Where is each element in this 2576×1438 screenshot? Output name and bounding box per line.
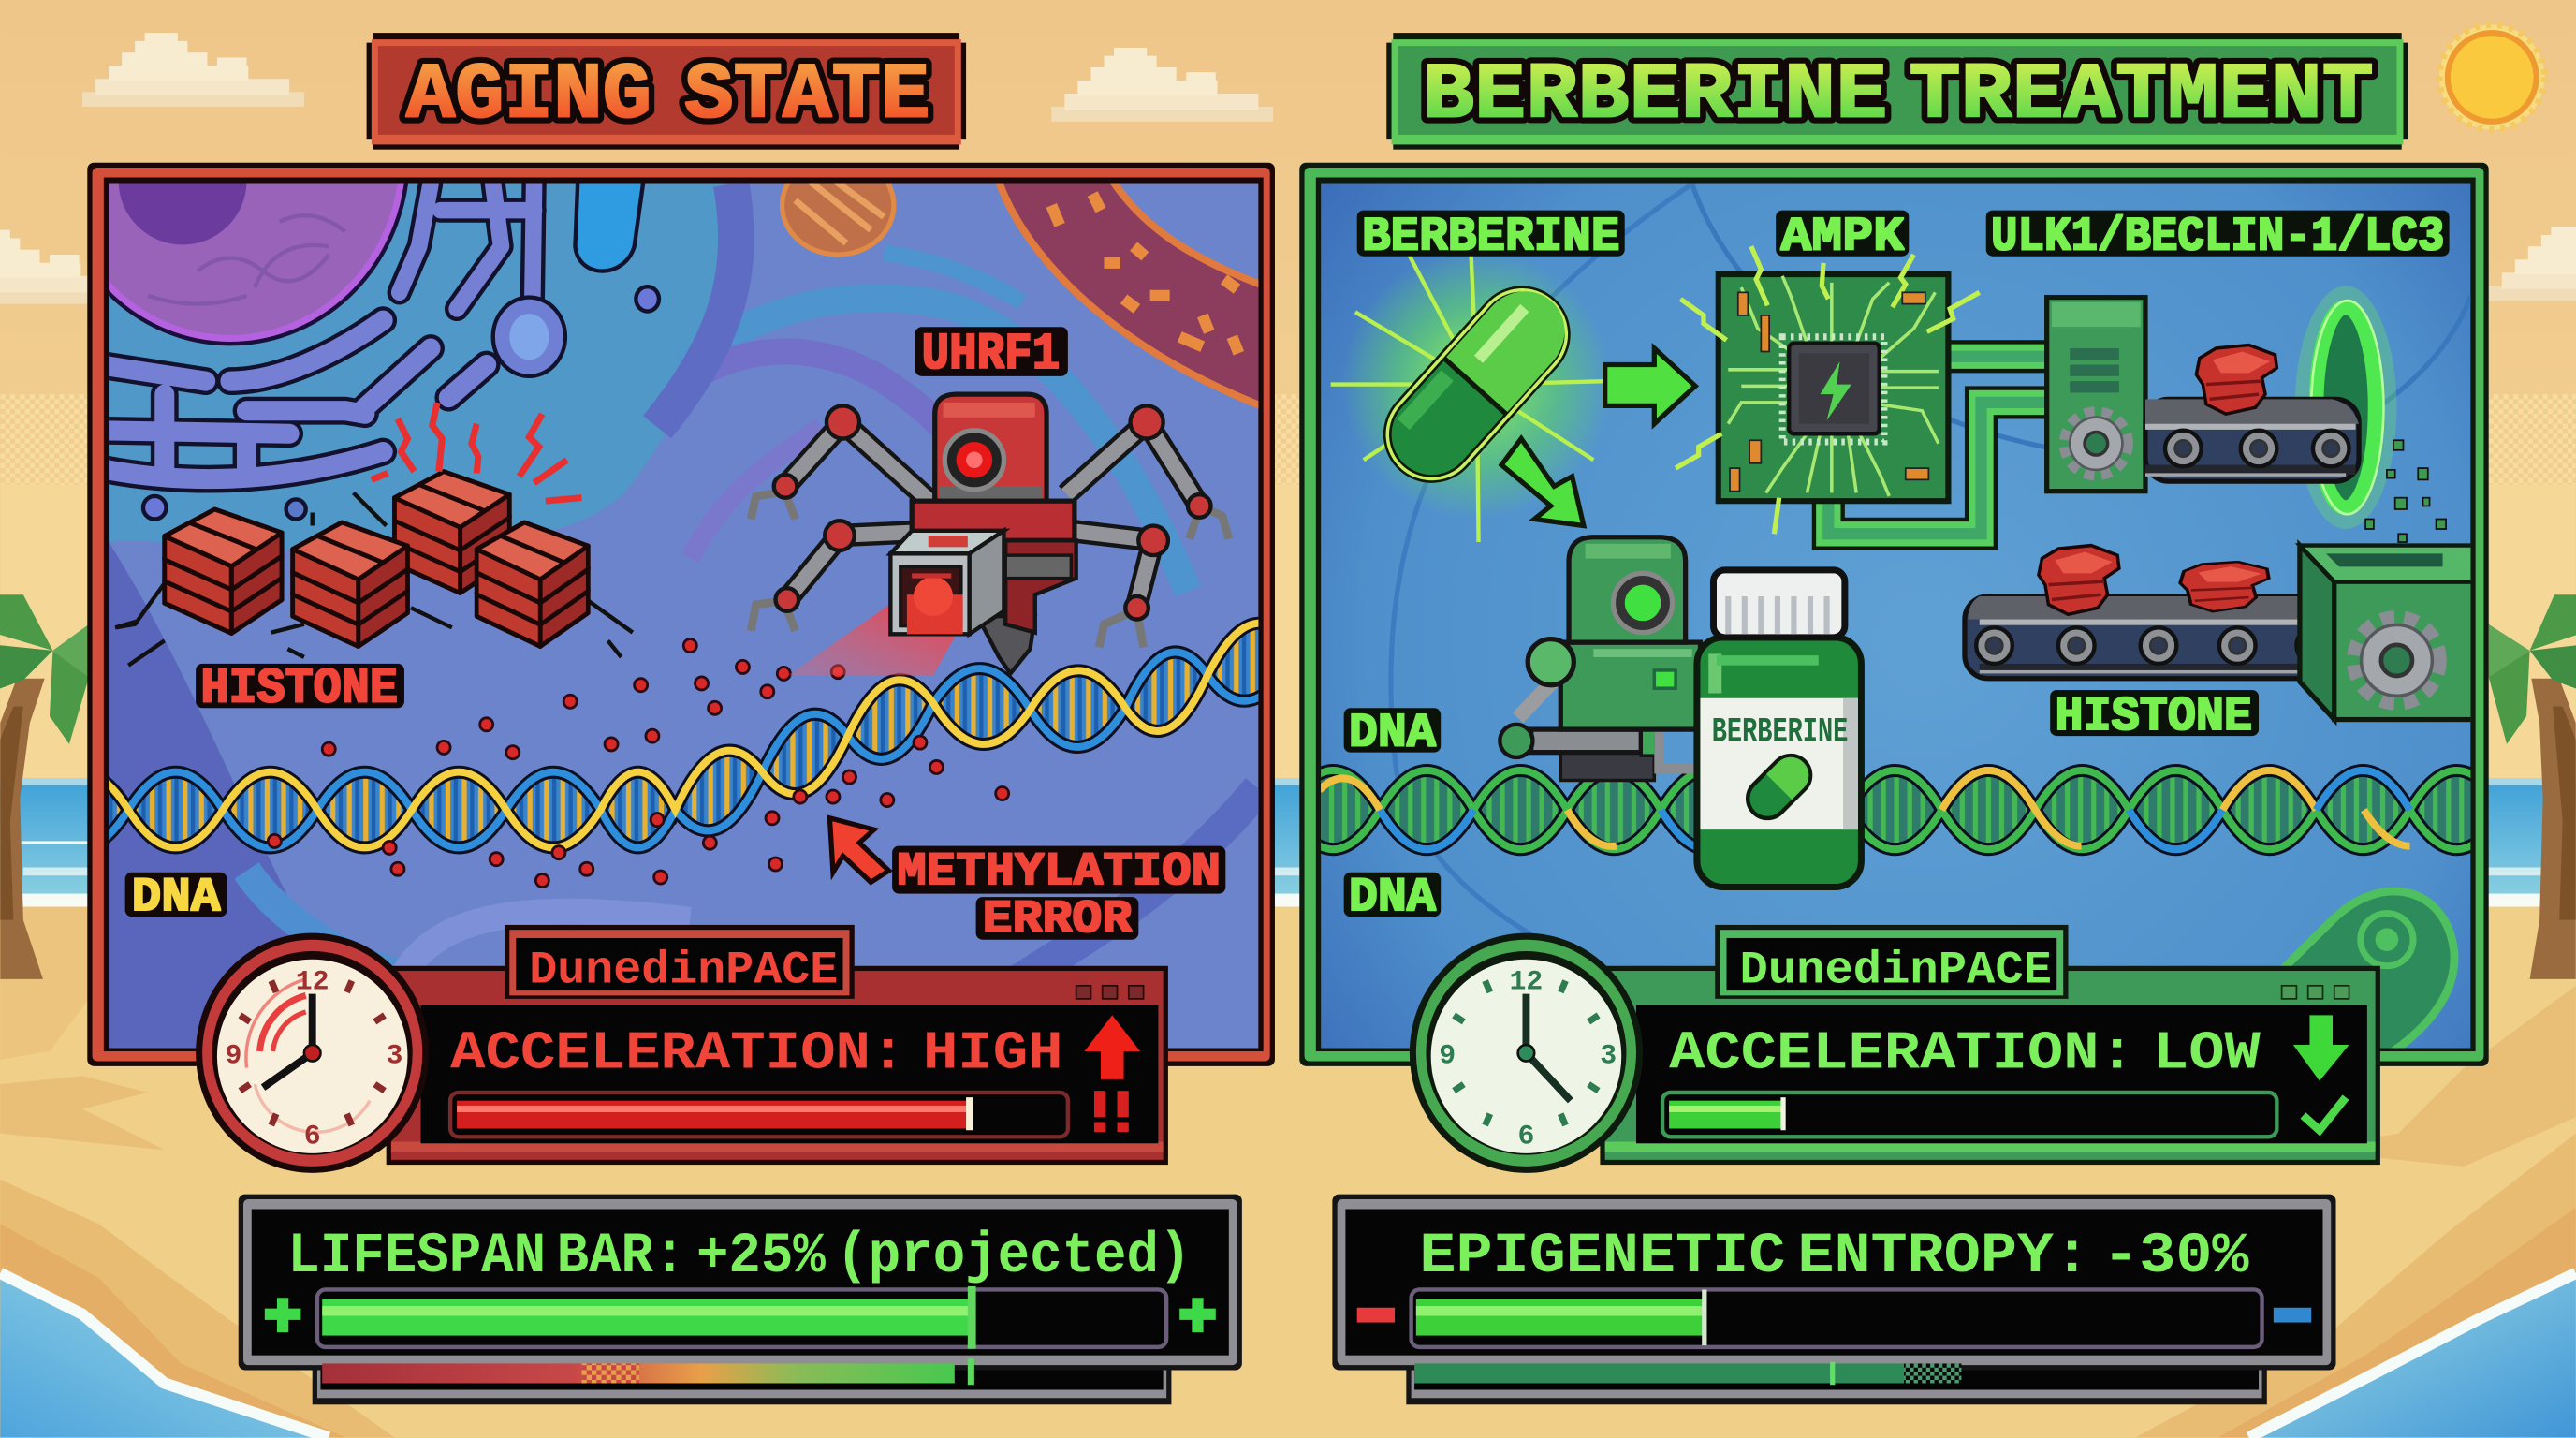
icon: minus marker (1357, 1308, 1395, 1323)
icon: cloud side left (0, 230, 137, 304)
recycling box with gear (2300, 546, 2476, 720)
sub bar: lifespan gradient (322, 1358, 974, 1385)
icon: sun (2439, 24, 2544, 130)
organelle: vesicles (143, 164, 659, 519)
label: methylation error: METHYLATION (897, 845, 1221, 898)
panel: lifespan bar (239, 1195, 1242, 1404)
clock numerals: 6 (1517, 1120, 1534, 1152)
icon: up arrow (1084, 1015, 1140, 1079)
tab: DunedinPACE: DunedinPACE (1740, 944, 2052, 996)
icon: check mark (2303, 1097, 2346, 1130)
panel: DunedinPACE low acceleration (1600, 925, 2380, 1165)
icon: cloud center (1051, 48, 1273, 122)
pipes: chip to machine (1828, 357, 2047, 534)
histone damage cracks (115, 492, 633, 666)
portal (2295, 286, 2396, 529)
window buttons (1076, 986, 1144, 999)
icon: glowing berberine capsule (1331, 238, 1612, 542)
icon: exclamation marks (1094, 1091, 1129, 1132)
arrow to methylation error (829, 818, 889, 882)
icon: down arrow (2293, 1015, 2349, 1081)
histone cluster (165, 472, 588, 646)
DNA helix left (34, 624, 1298, 847)
label: ULK1/BECLIN-1/LC3: ULK1/BECLIN-1/LC3 (1991, 212, 2444, 265)
machine with gear (2047, 298, 2145, 492)
clock numerals: 12 (1510, 965, 1543, 997)
debris particles (2365, 440, 2446, 542)
readout: epigenetic entropy: EPIGENETIC ENTROPY: -30% (1419, 1225, 2249, 1289)
icon: palm tree right (2489, 594, 2576, 979)
icon: blue marker (2274, 1308, 2311, 1323)
clock swirl marks (246, 979, 370, 1132)
histone on top conveyor (2196, 345, 2276, 414)
AMPK circuit chip (1676, 246, 1980, 534)
readout: acceleration high: ACCELERATION: HIGH (450, 1024, 1063, 1085)
organelle: reticulum band (996, 183, 1258, 409)
panel: aging state scene (87, 163, 1275, 1066)
readout: lifespan bar: LIFESPAN BAR: +25% (projected) (287, 1225, 1191, 1289)
label: DNA right lower: DNA (1349, 872, 1436, 925)
methylation error dots (268, 639, 1009, 888)
icon: cloud side right (2489, 227, 2576, 301)
organelle: endoplasmic reticulum (99, 184, 534, 479)
UHRF1 robot (751, 394, 1229, 675)
clock numerals: 3 (1600, 1039, 1617, 1071)
bar: acceleration low (1662, 1093, 2276, 1137)
panel: DunedinPACE high acceleration (387, 925, 1168, 1165)
robot laser beam (788, 605, 955, 676)
tab: DunedinPACE (505, 925, 855, 999)
label: berberine: BERBERINE (1362, 212, 1619, 265)
heading: aging state (367, 33, 966, 150)
heading: aging state: AGING STATE (406, 52, 929, 141)
arrow: capsule to AMPK (1605, 348, 1695, 424)
bar: entropy (1412, 1289, 2262, 1347)
clock numerals: 12 (296, 965, 329, 997)
panel: berberine treatment scene (1286, 163, 2503, 1068)
berberine bottle: BERBERINE (1712, 712, 1848, 752)
DNA helix right (1286, 770, 2503, 849)
icon: plus right (1179, 1298, 1216, 1332)
tab: DunedinPACE (1715, 925, 2068, 999)
icon: plus left (265, 1298, 300, 1332)
organelle: green mitochondrion (2280, 888, 2458, 1049)
panel: epigenetic entropy (1332, 1195, 2336, 1404)
label: DNA right upper: DNA (1349, 708, 1436, 761)
heading: berberine treatment: BERBERINE TREATMENT (1423, 52, 2374, 141)
icon: palm tree left (0, 594, 89, 979)
organelle: mitochondrion (779, 183, 897, 257)
berberine bottle (1697, 570, 1861, 888)
window buttons (2282, 986, 2349, 999)
clock numerals: 6 (304, 1120, 321, 1152)
histones on bottom conveyor (2039, 546, 2269, 614)
green robot (1500, 537, 1700, 780)
clock numerals: 9 (1439, 1039, 1456, 1071)
label: AMPK: AMPK (1780, 212, 1905, 265)
robot arms (751, 405, 1229, 647)
organelle: nucleus (109, 183, 408, 346)
bar: acceleration high (450, 1093, 1068, 1137)
label: methylation error: ERROR (983, 893, 1133, 946)
conveyor: top (2145, 399, 2359, 481)
arrow: capsule down to robot (1501, 439, 1584, 526)
tab: DunedinPACE: DunedinPACE (529, 944, 838, 996)
label: DNA left: DNA (132, 872, 221, 925)
damage sparks (372, 403, 581, 501)
label: methylation error (892, 845, 1225, 946)
label: histone left: HISTONE (200, 660, 398, 716)
clock numerals: 9 (226, 1039, 242, 1071)
icon: clock treatment (1410, 933, 1643, 1173)
readout: acceleration low: ACCELERATION: LOW (1669, 1024, 2261, 1085)
clock numerals: 3 (386, 1039, 402, 1071)
conveyor: bottom (1965, 596, 2336, 679)
label: UHRF1: UHRF1 (922, 327, 1060, 384)
icon: cloud left (82, 33, 304, 107)
sub bar: entropy (1414, 1362, 1961, 1385)
icon: clock aging (196, 933, 429, 1173)
heading: berberine treatment (1386, 33, 2408, 150)
label: histone right: HISTONE (2055, 691, 2252, 744)
clock numerals (226, 965, 402, 1152)
clock numerals (1439, 965, 1617, 1152)
bar: lifespan (317, 1286, 1166, 1349)
